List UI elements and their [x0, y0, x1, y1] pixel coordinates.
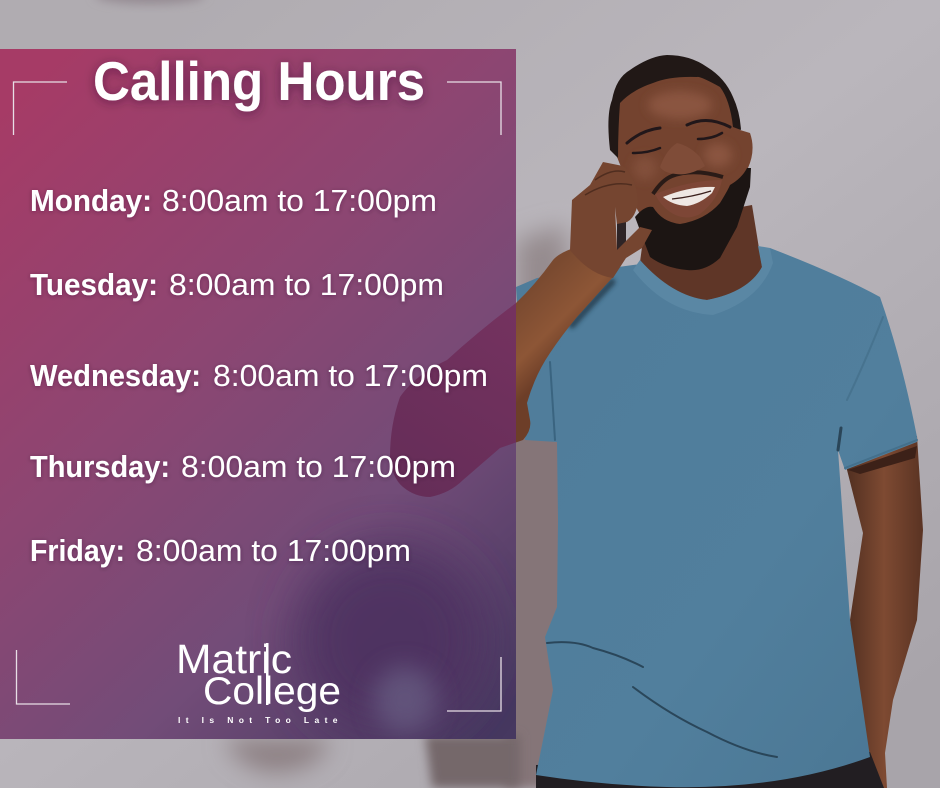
shirt folds [547, 282, 917, 757]
hand [570, 162, 652, 278]
beard [635, 168, 751, 270]
corner bracket: top left [14, 82, 67, 135]
panel tonal patches [280, 303, 516, 734]
panel: calling hours [0, 49, 516, 739]
logo tagline: It Is Not Too Late [178, 715, 340, 725]
Monday hours: Monday: [30, 183, 152, 218]
Tuesday hours: Tuesday: [30, 267, 158, 302]
mustache [653, 172, 723, 194]
Wednesday hours: 8:00am to 17:00pm [213, 358, 488, 393]
Tuesday hours: 8:00am to 17:00pm [169, 267, 444, 302]
schedule list [30, 183, 488, 568]
corner bracket: top right [447, 82, 501, 135]
trousers [536, 752, 884, 788]
Thursday hours: Thursday: [30, 449, 170, 484]
panel background [0, 49, 516, 739]
Tuesday hours [30, 267, 444, 302]
neck [640, 205, 762, 300]
nose [660, 143, 705, 174]
teeth [663, 187, 715, 206]
finger lines [585, 171, 632, 195]
lips [655, 180, 722, 218]
logo word: Matric: Matric [176, 636, 292, 682]
logo: Matric College [176, 636, 341, 725]
wall shadows [95, 0, 570, 788]
Thursday hours [30, 449, 456, 484]
Thursday hours: 8:00am to 17:00pm [181, 449, 456, 484]
Monday hours [30, 183, 437, 218]
shirt collar [633, 246, 773, 315]
Wednesday hours [30, 358, 488, 393]
face highlights [633, 91, 732, 180]
Wednesday hours: Wednesday: [30, 358, 201, 393]
photo: smiling man on a phone [390, 55, 923, 788]
hair [608, 55, 741, 158]
arm seen through panel [390, 303, 516, 497]
corner bracket: bottom left [16, 650, 70, 704]
logo shared stem [266, 643, 268, 705]
logo word: College: College [203, 670, 341, 713]
phone [617, 208, 626, 254]
sleeve underside shadow [848, 446, 917, 474]
corner bracket: bottom right [447, 657, 501, 711]
Friday hours: 8:00am to 17:00pm [136, 533, 411, 568]
Friday hours: Friday: [30, 533, 125, 568]
head [612, 60, 753, 250]
t-shirt [516, 248, 917, 787]
forearm [390, 245, 613, 497]
eyes and brows [627, 120, 730, 153]
far arm [845, 436, 923, 788]
title: Calling Hours [93, 50, 425, 112]
Monday hours: 8:00am to 17:00pm [162, 183, 437, 218]
